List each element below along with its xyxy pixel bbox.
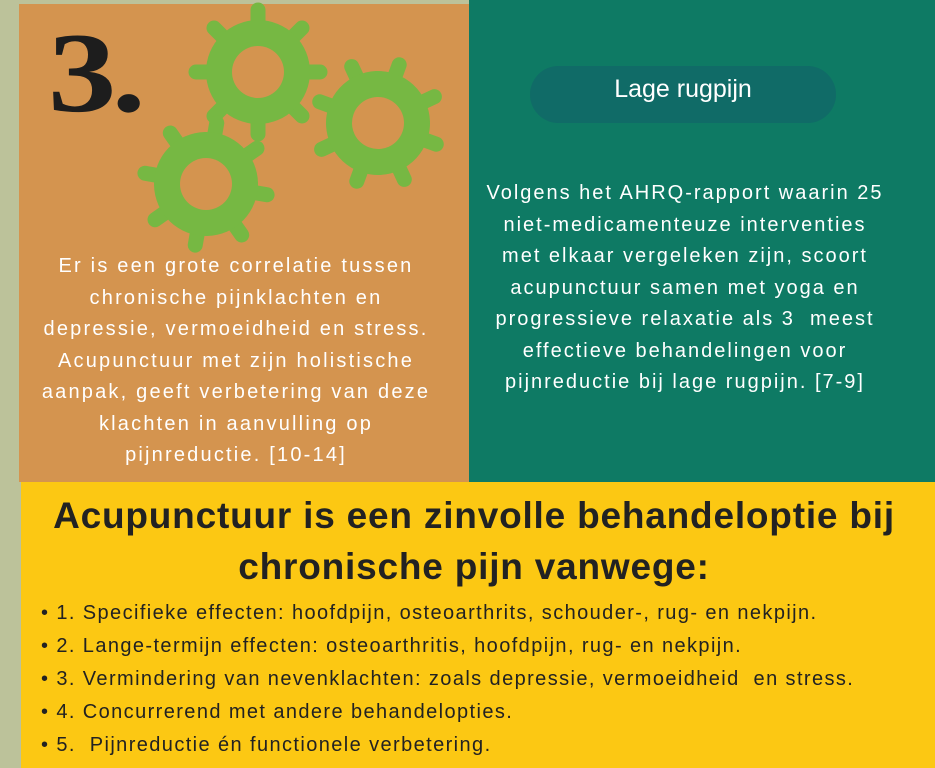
text: AHRQ paragraph: pijnreductie bij lage rugpijn. [7-9] (505, 371, 865, 393)
text: AHRQ paragraph: Volgens het AHRQ-rapport waarin 25 (486, 182, 884, 204)
pill heading: Lage rugpijn: Lage rugpijn (614, 75, 752, 103)
text: AHRQ paragraph (486, 182, 884, 393)
icon: gears (137, 2, 444, 253)
bullet list: • 1. Specifieke effecten: hoofdpijn, osteoarthrits, schouder-, rug- en nekpijn. (41, 602, 818, 624)
text: AHRQ paragraph: met elkaar vergeleken zijn, scoort (502, 245, 868, 267)
panel: green right (469, 0, 935, 482)
heading: Acupunctuur is een zinvolle behandeloptie bij (53, 495, 895, 536)
panel: orange left (19, 4, 469, 482)
heading (53, 495, 895, 587)
bullet list: • 5. Pijnreductie én functionele verbetering. (41, 734, 492, 756)
text: correlation paragraph (42, 255, 430, 466)
text: correlation paragraph: klachten in aanvulling op (99, 412, 373, 434)
pill heading: Lage rugpijn (530, 66, 836, 123)
text: correlation paragraph: depressie, vermoeidheid en stress. (44, 318, 428, 340)
bullet list (41, 602, 854, 756)
text: correlation paragraph: Acupunctuur met zijn holistische (58, 350, 414, 372)
text: AHRQ paragraph: niet-medicamenteuze interventies (503, 214, 867, 236)
bullet list: • 2. Lange-termijn effecten: osteoarthritis, hoofdpijn, rug- en nekpijn. (41, 635, 742, 657)
text: AHRQ paragraph: progressieve relaxatie als 3 meest (495, 308, 875, 330)
heading: chronische pijn vanwege: (238, 546, 710, 587)
text: correlation paragraph: aanpak, geeft verbetering van deze (42, 381, 430, 403)
number 3: 3. (48, 9, 141, 136)
text: correlation paragraph: Er is een grote correlatie tussen (59, 255, 413, 277)
text: AHRQ paragraph: effectieve behandelingen voor (523, 340, 847, 362)
text: correlation paragraph: pijnreductie. [10-14] (125, 444, 347, 466)
panel: yellow bottom (21, 482, 935, 768)
text: correlation paragraph: chronische pijnklachten en (90, 286, 382, 308)
bullet list: • 4. Concurrerend met andere behandelopties. (41, 701, 513, 723)
text: AHRQ paragraph: acupunctuur samen met yoga en (510, 276, 860, 298)
bullet list: • 3. Vermindering van nevenklachten: zoals depressie, vermoeidheid en stress. (41, 668, 854, 690)
